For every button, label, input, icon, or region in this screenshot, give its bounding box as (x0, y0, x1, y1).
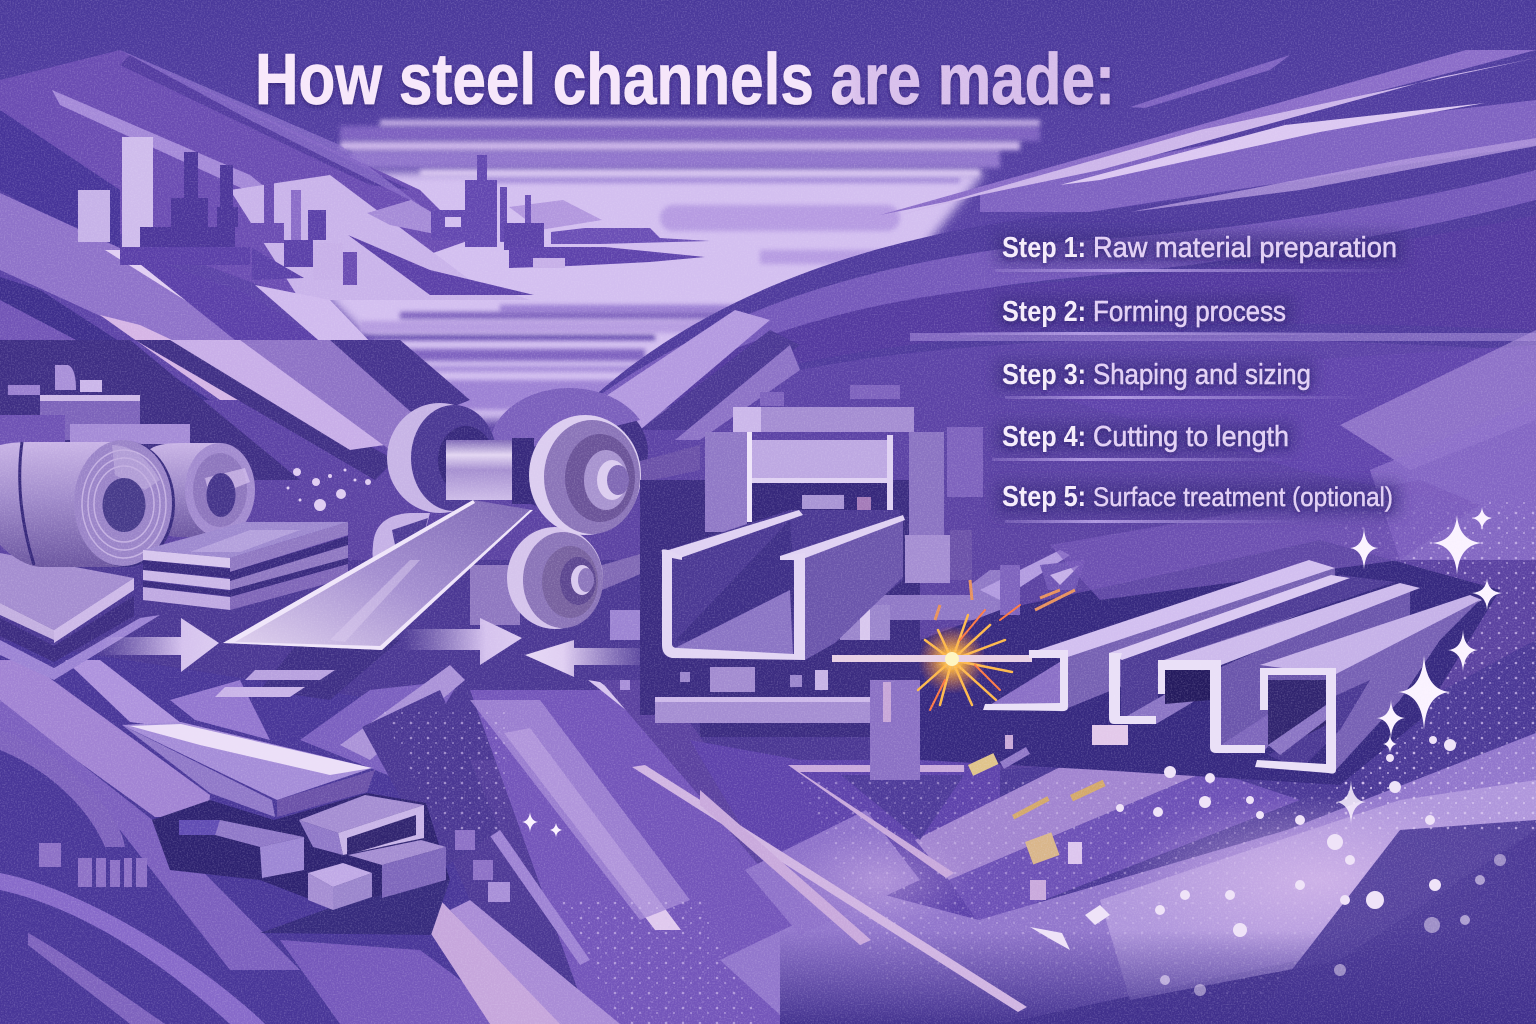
arrow 3 (525, 640, 652, 677)
icon: finished steel channel 1 (983, 560, 1335, 711)
step 3 (1002, 359, 1311, 391)
step 2 rule (960, 332, 1360, 335)
step 4: Step 4: (1002, 421, 1086, 453)
mid-left dark wedge and diagonals (0, 340, 300, 480)
icon: upper forming roller (387, 403, 700, 535)
cutting beam and upper debris (980, 480, 1480, 615)
icon: finished steel channel 4 (1255, 595, 1482, 774)
centre right diagonals (600, 310, 770, 430)
icon: bottom left small roller (372, 513, 430, 575)
step 1: Raw material preparation (1093, 232, 1397, 264)
step 1: Step 1: (1002, 232, 1086, 264)
title: How steel channels are made: (255, 40, 1115, 120)
icon: large steel channel in press (662, 510, 905, 660)
icon: sparkle stars (522, 507, 1502, 837)
coil stack background blocks (0, 365, 190, 460)
small debris under sheet (215, 610, 660, 697)
step 5 (1002, 481, 1393, 513)
arrow 2 (402, 618, 522, 665)
icon: front steel coil (0, 440, 175, 567)
dark mass behind finished channels (920, 540, 1500, 785)
icon: finished steel channel 2 (1109, 575, 1395, 724)
step 5 rule (1005, 520, 1305, 523)
icon: lower forming roller (470, 527, 650, 629)
lower right fields (690, 740, 1000, 1024)
step 1 rule (995, 269, 1405, 272)
step 3: Shaping and sizing (1093, 359, 1311, 391)
step 2: Step 2: (1002, 296, 1086, 328)
step list (960, 232, 1405, 523)
step 5: Surface treatment (optional) (1093, 482, 1393, 512)
step 2: Forming process (1093, 296, 1286, 328)
scattered sparkles lower right (1116, 736, 1506, 996)
base under coil (0, 553, 160, 680)
arrow 1 (98, 618, 219, 672)
distant factory skyline left (78, 137, 357, 285)
icon: finished steel channel 3 (1158, 583, 1420, 753)
mid band (0, 560, 880, 760)
lower left (0, 640, 560, 1024)
step 4 (1002, 421, 1289, 453)
icon: steel sheet feeding into rollers (223, 500, 533, 650)
icon: lower-left stacked steel beams (122, 722, 450, 935)
small blocks lower left (39, 830, 510, 902)
step 2 (1002, 296, 1286, 328)
horizon (270, 120, 1040, 420)
step 3 rule (1005, 396, 1370, 399)
upper right swoosh (590, 140, 1536, 420)
step backing (995, 232, 1405, 516)
step 5: Step 5: (1002, 481, 1086, 513)
icon: stacked steel plates (143, 522, 348, 610)
step 3: Step 3: (1002, 359, 1086, 391)
icon: rear steel coil (145, 443, 255, 537)
distant factory skyline centre (367, 155, 710, 268)
step 4 rule (992, 458, 1292, 461)
icon: cutting sparks (832, 580, 1075, 710)
lower centre (260, 640, 400, 700)
step 4: Cutting to length (1093, 421, 1289, 453)
icon: rear top roller (490, 388, 648, 512)
gold and pink confetti (968, 725, 1128, 950)
sparkle dots near coil (286, 468, 371, 511)
upper left diagonal bands (0, 50, 470, 300)
press machine (640, 385, 1000, 780)
